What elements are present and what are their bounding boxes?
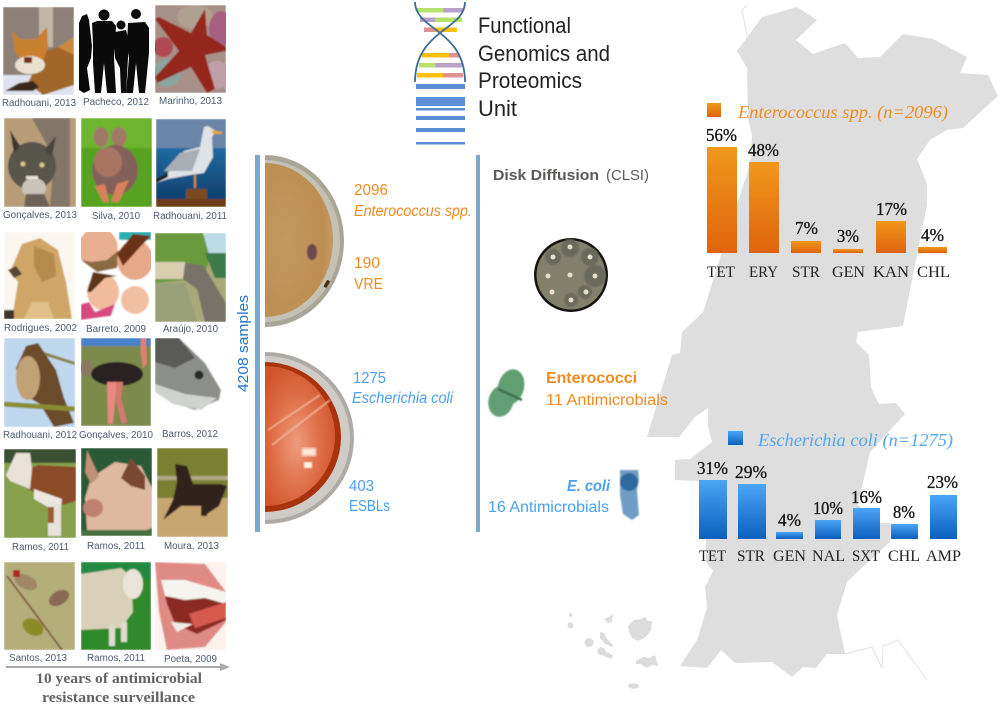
bars bbox=[699, 480, 957, 539]
heading: Functional Genomics and Proteomics Unit: Unit bbox=[478, 96, 517, 121]
value labels: 31% bbox=[697, 458, 728, 478]
legend: Enterococcus spp.: Enterococcus spp. (n=2096) bbox=[737, 102, 948, 122]
heading: Functional Genomics and Proteomics Unit: Functional bbox=[478, 13, 571, 38]
photo: finches bbox=[4, 562, 75, 650]
caption: Moura, 2013: Moura, 2013 bbox=[164, 541, 219, 552]
chart: Enterococcus resistance bbox=[706, 102, 950, 281]
value labels bbox=[697, 458, 958, 530]
label: Enterococci 11 Antimicrobials: 11 Antimicrobials bbox=[546, 392, 668, 409]
caption: Gonçalves, 2010: Gonçalves, 2010 bbox=[79, 430, 153, 441]
axis labels: CHL bbox=[888, 548, 920, 565]
photo: open mouth bbox=[155, 562, 226, 650]
axis labels: GEN bbox=[773, 548, 806, 565]
caption: Gonçalves, 2013: Gonçalves, 2013 bbox=[3, 210, 77, 221]
value labels: 10% bbox=[813, 498, 843, 518]
axis labels: GEN bbox=[832, 264, 865, 281]
chart: Escherichia coli resistance bbox=[697, 430, 961, 565]
icon: DNA helix with gel bands bbox=[415, 2, 465, 144]
axis labels: STR bbox=[737, 548, 766, 565]
heading: Functional Genomics and Proteomics Unit: Genomics and bbox=[478, 41, 610, 66]
photo: fish bbox=[155, 338, 222, 411]
axis labels: TET bbox=[699, 548, 727, 565]
value labels: 23% bbox=[927, 472, 958, 492]
label: E. coli 16 Antimicrobials bbox=[488, 478, 611, 516]
label: 1275 Escherichia coli: Escherichia coli bbox=[352, 390, 454, 407]
petri dish: Enterococcus bbox=[265, 155, 344, 327]
photo: pig bbox=[81, 448, 152, 536]
heading: 10 years of antimicrobial resistance surveillance: 10 years of antimicrobial bbox=[36, 671, 202, 687]
axis labels: ERY bbox=[749, 264, 778, 281]
label: E. coli 16 Antimicrobials: E. coli bbox=[567, 478, 611, 495]
axis labels: STR bbox=[792, 264, 821, 281]
photo: fox bbox=[3, 7, 74, 95]
label: 190 VRE: 190 bbox=[354, 255, 380, 272]
label: 403 ESBLs: ESBLs bbox=[349, 498, 390, 515]
label: 2096 Enterococcus spp. bbox=[354, 182, 472, 220]
petri dish: Escherichia coli bbox=[265, 352, 354, 524]
value labels: 48% bbox=[748, 140, 779, 160]
photo: lynx bbox=[4, 118, 76, 207]
value labels: 3% bbox=[837, 226, 859, 246]
label: 1275 Escherichia coli: 1275 bbox=[353, 370, 386, 387]
photo: human silhouettes bbox=[79, 9, 149, 93]
photo: seagull bbox=[156, 119, 226, 207]
photo: rabbit bbox=[81, 118, 152, 207]
label: 4208 samples: 4208 samples bbox=[235, 295, 252, 392]
photo: starfish bbox=[155, 5, 226, 93]
caption: Radhouani, 2011: Radhouani, 2011 bbox=[153, 211, 227, 222]
label: 1275 Escherichia coli bbox=[352, 370, 454, 407]
heading: Functional Genomics and Proteomics Unit: Proteomics bbox=[478, 68, 582, 93]
icon: enterococci bacterium bbox=[485, 366, 528, 420]
caption: Radhouani, 2013: Radhouani, 2013 bbox=[2, 98, 76, 109]
bars bbox=[707, 147, 947, 253]
caption: Pacheco, 2012: Pacheco, 2012 bbox=[83, 97, 149, 108]
caption: Ramos, 2011: Ramos, 2011 bbox=[12, 542, 69, 553]
value labels: 56% bbox=[706, 125, 737, 145]
label: 403 ESBLs: 403 bbox=[349, 478, 374, 495]
axis labels bbox=[707, 264, 950, 281]
photo: hawk bbox=[4, 338, 75, 427]
Azores and Madeira islands bbox=[568, 613, 658, 689]
label: Enterococci 11 Antimicrobials: Enterococci bbox=[546, 370, 637, 387]
axis labels: NAL bbox=[812, 548, 845, 565]
photo: cow bbox=[4, 449, 76, 538]
axis labels bbox=[699, 548, 961, 565]
value labels: 8% bbox=[893, 502, 915, 522]
caption: Poeta, 2009: Poeta, 2009 bbox=[164, 654, 217, 665]
label: 2096 Enterococcus spp.: Enterococcus spp. bbox=[354, 203, 472, 220]
caption: Barros, 2012: Barros, 2012 bbox=[162, 429, 218, 440]
heading: Disk Diffusion (CLSI): (CLSI) bbox=[606, 167, 649, 184]
caption: Ramos, 2011: Ramos, 2011 bbox=[87, 653, 145, 664]
photo: wastewater pipe bbox=[155, 233, 226, 322]
axis labels: TET bbox=[707, 264, 736, 281]
label: 403 ESBLs bbox=[349, 478, 390, 515]
map of Portugal bbox=[568, 5, 998, 689]
axis labels: SXT bbox=[852, 548, 880, 565]
photo: puppy bbox=[4, 232, 75, 319]
value labels: 17% bbox=[876, 199, 907, 219]
label: 2096 Enterococcus spp.: 2096 bbox=[354, 182, 388, 199]
legend: Escherichia coli: Escherichia coli (n=1275) bbox=[757, 430, 953, 450]
axis labels: CHL bbox=[917, 264, 950, 281]
label: 190 VRE bbox=[354, 255, 383, 293]
photo: ostrich bbox=[81, 338, 151, 426]
panel: photo grid of sampled sources bbox=[2, 5, 233, 665]
caption: Silva, 2010: Silva, 2010 bbox=[92, 211, 140, 222]
value labels: 16% bbox=[851, 487, 882, 507]
divider bar: methods bbox=[476, 155, 480, 532]
caption: Radhouani, 2012: Radhouani, 2012 bbox=[3, 430, 77, 441]
caption: Barreto, 2009: Barreto, 2009 bbox=[86, 324, 146, 335]
label: E. coli 16 Antimicrobials: 16 Antimicrobials bbox=[488, 499, 609, 516]
photo: horse bbox=[157, 448, 228, 537]
value labels: 4% bbox=[778, 510, 801, 530]
divider bar: samples bbox=[255, 155, 260, 532]
label: 190 VRE: VRE bbox=[354, 276, 383, 293]
axis labels: AMP bbox=[926, 548, 961, 565]
value labels: 7% bbox=[795, 218, 818, 238]
heading: Disk Diffusion (CLSI): Disk Diffusion bbox=[493, 167, 599, 184]
caption: Ramos, 2011: Ramos, 2011 bbox=[87, 541, 145, 552]
icon: E. coli bacterium bbox=[620, 470, 639, 520]
photo: children bbox=[81, 232, 151, 320]
axis labels: KAN bbox=[873, 264, 909, 281]
value labels: 4% bbox=[921, 225, 944, 245]
caption: Rodrigues, 2002: Rodrigues, 2002 bbox=[4, 323, 77, 334]
caption: Araújo, 2010: Araújo, 2010 bbox=[163, 324, 218, 335]
caption: Marinho, 2013: Marinho, 2013 bbox=[159, 96, 222, 107]
value labels: 29% bbox=[735, 462, 767, 482]
icon: disk diffusion plate bbox=[534, 238, 608, 312]
label: Enterococci 11 Antimicrobials bbox=[546, 370, 668, 409]
value labels bbox=[706, 125, 944, 246]
photo: sheep bbox=[81, 562, 151, 650]
caption: Santos, 2013: Santos, 2013 bbox=[9, 653, 67, 664]
arrow: timeline bbox=[6, 663, 230, 671]
